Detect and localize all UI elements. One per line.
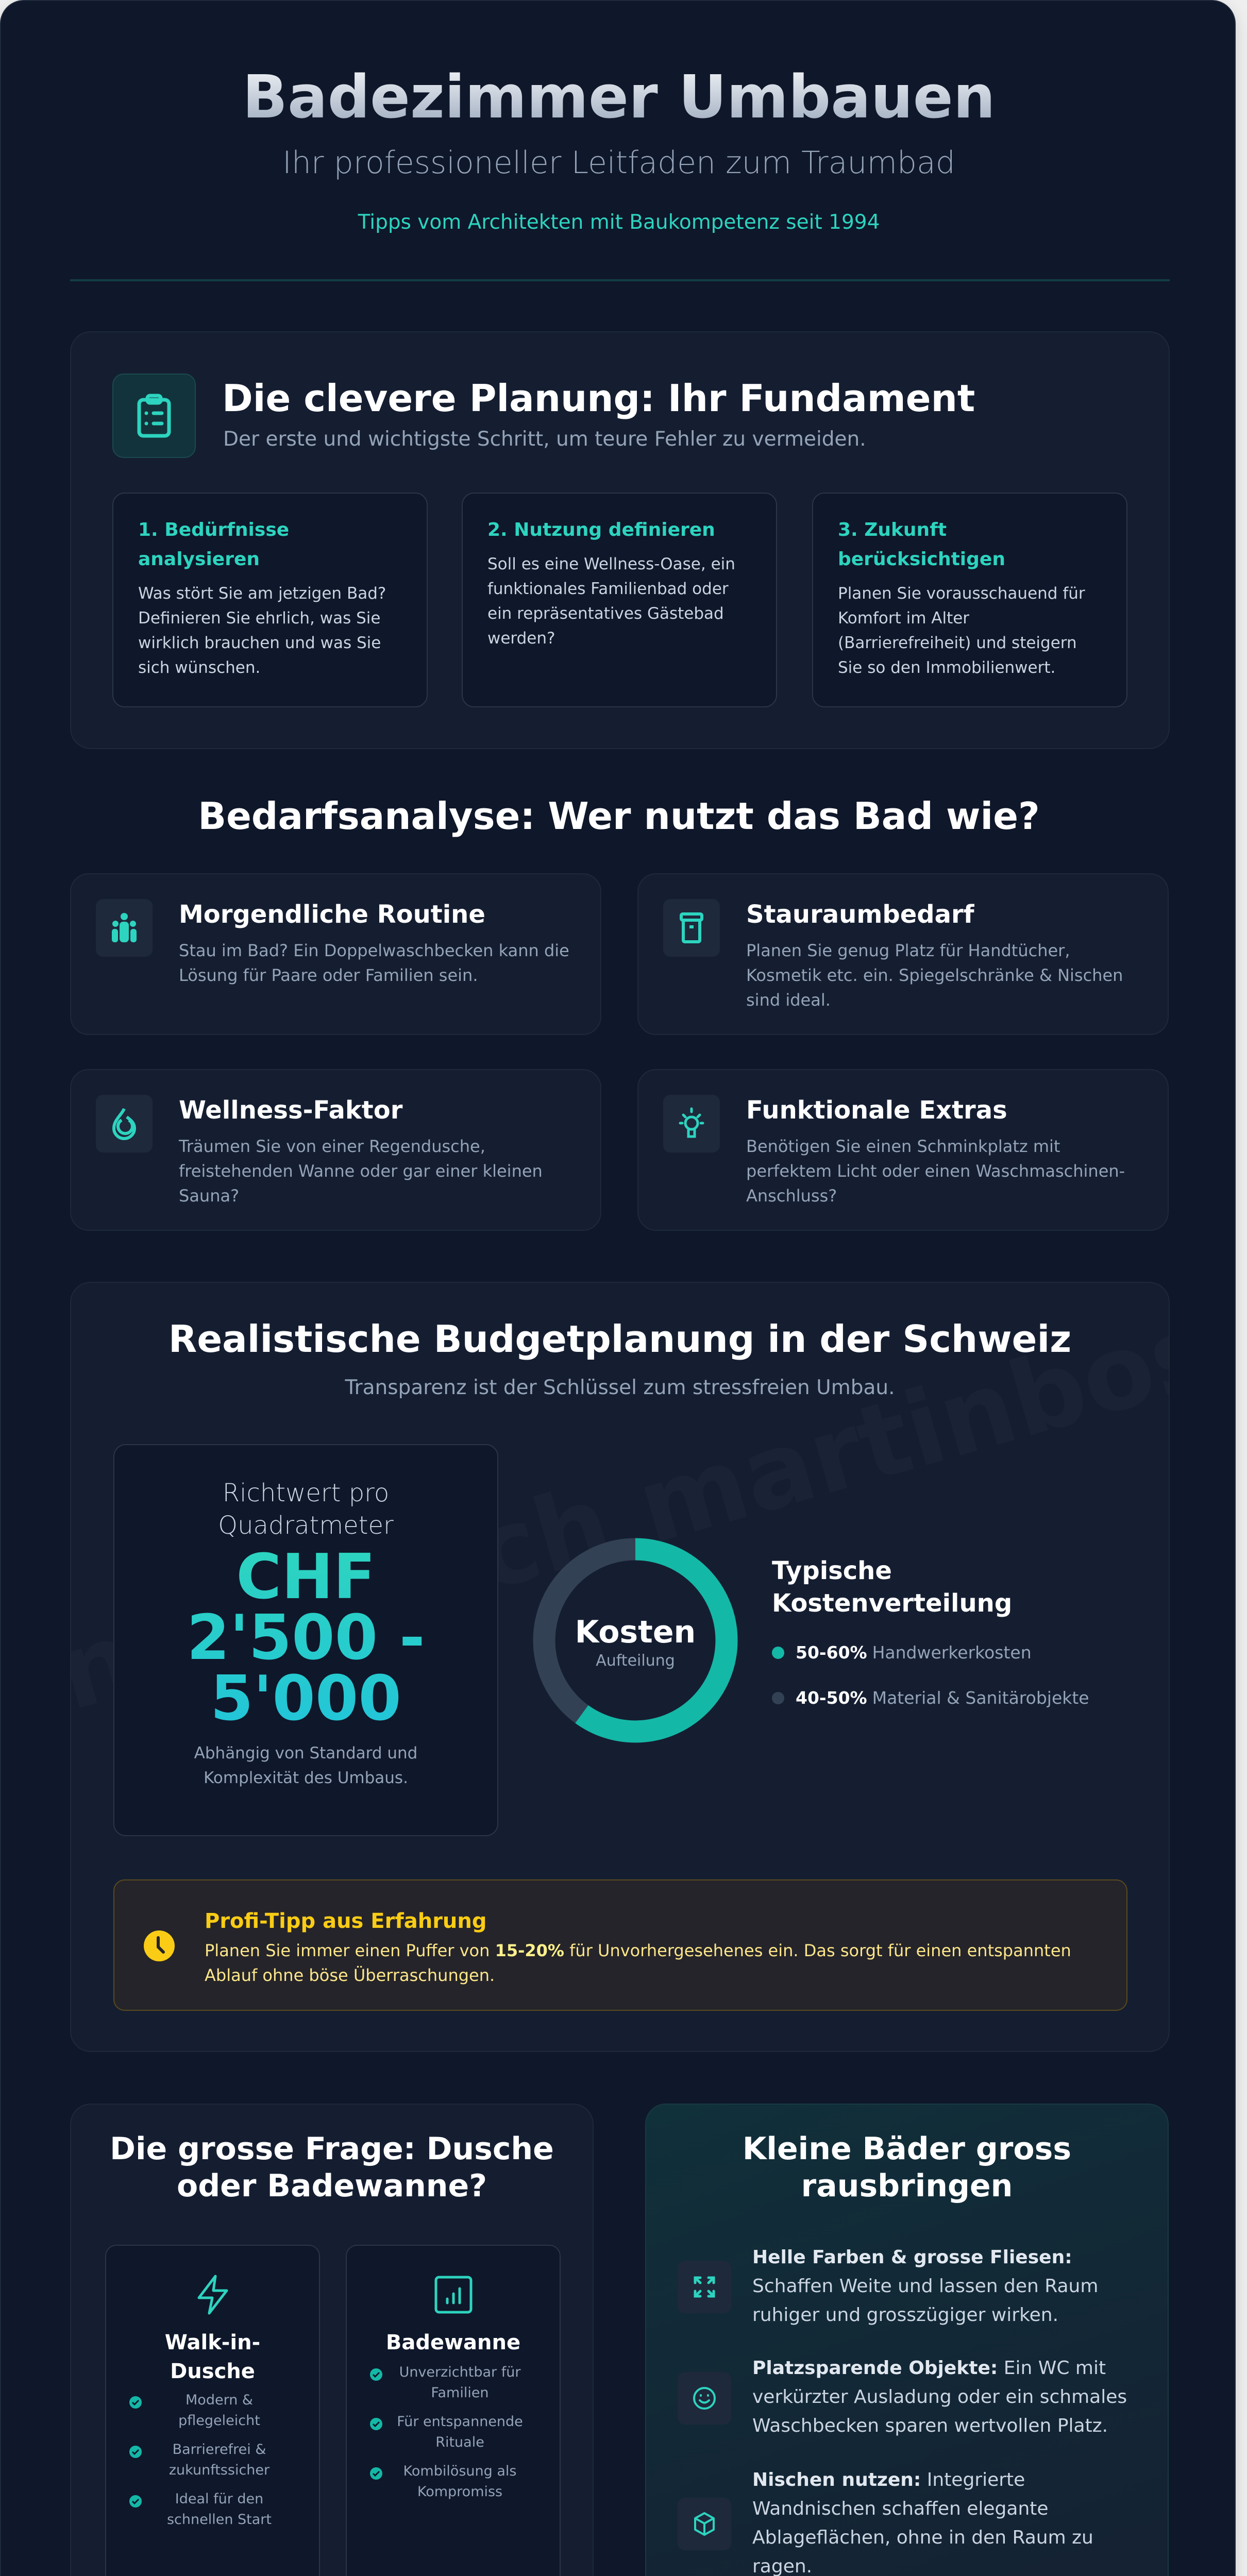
- card: Stauraumbedarf: [637, 873, 1169, 1035]
- heading: Die clevere Planung: Ihr Fundament: [222, 377, 975, 420]
- panel: Dusche oder Badewanne: Die grosse Frage: Dusche: [110, 2131, 554, 2167]
- price box: Richtwert pro: [223, 1479, 389, 1507]
- card: Morgendliche Routine: Stau im Bad? Ein Doppelwaschbecken kann die Lösung für Paare oder Familien sein.: [179, 941, 569, 985]
- icon: smiley: [678, 2372, 731, 2425]
- card: Walk-in-Dusche: Barrierefrei &: [173, 2442, 266, 2458]
- card: Wellness-Faktor: [70, 1069, 601, 1231]
- item: Nischen nutzen: Nischen nutzen: Integrierte Wandnischen schaffen elegante Ablageflächen, ohne in den Raum zu ragen.: [752, 2469, 1093, 2576]
- card 3: Planen Sie vorausschauend für Komfort im Alter (Barrierefreiheit) und steigern Sie so den Immobilienwert.: [838, 584, 1085, 677]
- card: Wellness-Faktor: Wellness-Faktor: [179, 1096, 402, 1125]
- donut chart: Aufteilung: [596, 1652, 675, 1670]
- icon: box: [663, 899, 720, 957]
- icon: lightning: [198, 2275, 228, 2314]
- icon: expand: [678, 2261, 731, 2313]
- panel: Kleine Bäder: Kleine Bäder gross: [743, 2131, 1071, 2167]
- subheading: Der erste und wichtigste Schritt, um teure Fehler zu vermeiden.: [223, 428, 866, 451]
- card: Badewanne: Unverzichtbar für: [399, 2364, 520, 2380]
- callout: Profi-Tipp: Planen Sie immer einen Puffer von 15-20% für Unvorhergesehenes ein. Das sorgt für einen entspannten Ablauf ohne böse Überraschungen.: [205, 1941, 1071, 1985]
- legend: Material & Sanitärobjekte: [872, 1688, 1089, 1708]
- card 2: [462, 493, 777, 707]
- price box: Komplexität des Umbaus.: [204, 1769, 408, 1787]
- panel: budget: [70, 1282, 1170, 2052]
- donut chart: [533, 1538, 738, 1742]
- icon: bulb: [663, 1095, 720, 1153]
- callout: Profi-Tipp: [113, 1879, 1127, 2011]
- title: Badezimmer Umbauen: [242, 63, 996, 132]
- item: Helle Farben: Helle Farben & grosse Fliesen: Schaffen Weite und lassen den Raum ruhiger und grosszügiger wirken.: [752, 2247, 1098, 2326]
- card: Badewanne: Kombilösung als: [403, 2463, 516, 2479]
- icon: clipboard: [112, 374, 196, 458]
- card: Funktionale Extras: Funktionale Extras: [746, 1096, 1007, 1125]
- card: Walk-in-Dusche: Walk-in-: [165, 2331, 260, 2354]
- card 1: 1. Bedürfnisse analysieren: [138, 519, 289, 570]
- card: Badewanne: Für entspannende: [397, 2414, 523, 2430]
- legend: Kostenverteilung: [772, 1589, 1012, 1618]
- icon: people: [96, 899, 153, 957]
- panel: Dusche oder Badewanne: [70, 2104, 594, 2576]
- heading: Bedarfsanalyse: Bedarfsanalyse: Wer nutzt das Bad wie?: [198, 794, 1040, 838]
- card 1: Was stört Sie am jetzigen Bad? Definieren Sie ehrlich, was Sie wirklich brauchen und was Sie sich wünschen.: [138, 584, 386, 677]
- price box: Quadratmeter: [218, 1511, 394, 1540]
- card: Walk-in-Dusche: schnellen Start: [167, 2512, 272, 2528]
- card: Funktionale Extras: Benötigen Sie einen Schminkplatz mit perfektem Licht oder einen Waschmaschinen-Anschluss?: [746, 1137, 1125, 1206]
- card: Badewanne: Kompromiss: [417, 2484, 502, 2500]
- card: Morgendliche Routine: Morgendliche Routine: [179, 900, 485, 929]
- icon: chart: [435, 2276, 472, 2313]
- card 3: [812, 493, 1127, 707]
- subheading: Transparenz ist der Schlüssel zum stressfreien Umbau.: [345, 1376, 895, 1399]
- tagline: Tipps vom Architekten mit Baukompetenz seit 1994: [358, 211, 880, 234]
- icon: clock: [144, 1930, 175, 1961]
- price box: Abhängig von Standard und: [194, 1744, 417, 1762]
- legend: Typische: [772, 1556, 892, 1585]
- legend: Handwerkerkosten: [872, 1642, 1032, 1663]
- heading: Realistische Budgetplanung in der Schweiz: [168, 1317, 1071, 1361]
- panel: Kleine Bäder: [645, 2104, 1169, 2576]
- card: Stauraumbedarf: Planen Sie genug Platz für Handtücher, Kosmetik etc. ein. Spiegelschränke & Nischen sind ideal.: [746, 941, 1123, 1010]
- price box: CHF: [236, 1541, 376, 1613]
- price box: 2'500 -: [187, 1602, 425, 1674]
- card 2: 2. Nutzung definieren: [487, 519, 715, 540]
- card: Morgendliche Routine: [70, 873, 601, 1035]
- callout: Profi-Tipp: Profi-Tipp aus Erfahrung: [205, 1909, 487, 1933]
- donut chart: Kosten: [575, 1614, 696, 1650]
- icon: cube: [678, 2498, 731, 2550]
- card: Badewanne: [346, 2245, 561, 2576]
- title: [1, 60, 1237, 135]
- card: Badewanne: Badewanne: [386, 2331, 520, 2354]
- panel: planning: [70, 331, 1170, 749]
- legend: [772, 1556, 1089, 1708]
- card: Walk-in-Dusche: Dusche: [170, 2360, 255, 2383]
- card: Walk-in-Dusche: zukunftssicher: [169, 2462, 269, 2478]
- card: Walk-in-Dusche: pflegeleicht: [178, 2413, 260, 2429]
- card: Funktionale Extras: [637, 1069, 1169, 1231]
- panel: Kleine Bäder: rausbringen: [801, 2168, 1013, 2204]
- legend: 40-50%: [796, 1688, 867, 1708]
- item: Platzsparende Objekte: Platzsparende Objekte: Ein WC mit verkürzter Ausladung oder ein schmales Waschbecken sparen wertvollen Platz.: [752, 2358, 1127, 2436]
- card 2: Soll es eine Wellness-Oase, ein funktionales Familienbad oder ein repräsentatives Gästebad werden?: [487, 555, 735, 648]
- card 3: 3. Zukunft berücksichtigen: [838, 519, 1005, 570]
- card: Badewanne: Familien: [431, 2385, 489, 2401]
- card: Badewanne: Rituale: [435, 2434, 484, 2450]
- icon: drop: [96, 1095, 153, 1153]
- price box: 5'000: [210, 1663, 401, 1735]
- legend: 50-60%: [796, 1642, 867, 1663]
- card 1: [112, 493, 428, 707]
- card: Wellness-Faktor: Träumen Sie von einer Regendusche, freistehenden Wanne oder gar einer kleinen Sauna?: [179, 1137, 543, 1206]
- price box: [113, 1444, 498, 1836]
- subtitle: Ihr professioneller Leitfaden zum Traumbad: [282, 145, 955, 181]
- panel: Dusche oder Badewanne: oder Badewanne?: [177, 2168, 487, 2204]
- card: Walk-in-Dusche: Modern &: [186, 2392, 253, 2408]
- card: Stauraumbedarf: Stauraumbedarf: [746, 900, 974, 929]
- card: Walk-in-Dusche: Ideal für den: [175, 2491, 263, 2507]
- card: Walk-in-Dusche: [105, 2245, 320, 2576]
